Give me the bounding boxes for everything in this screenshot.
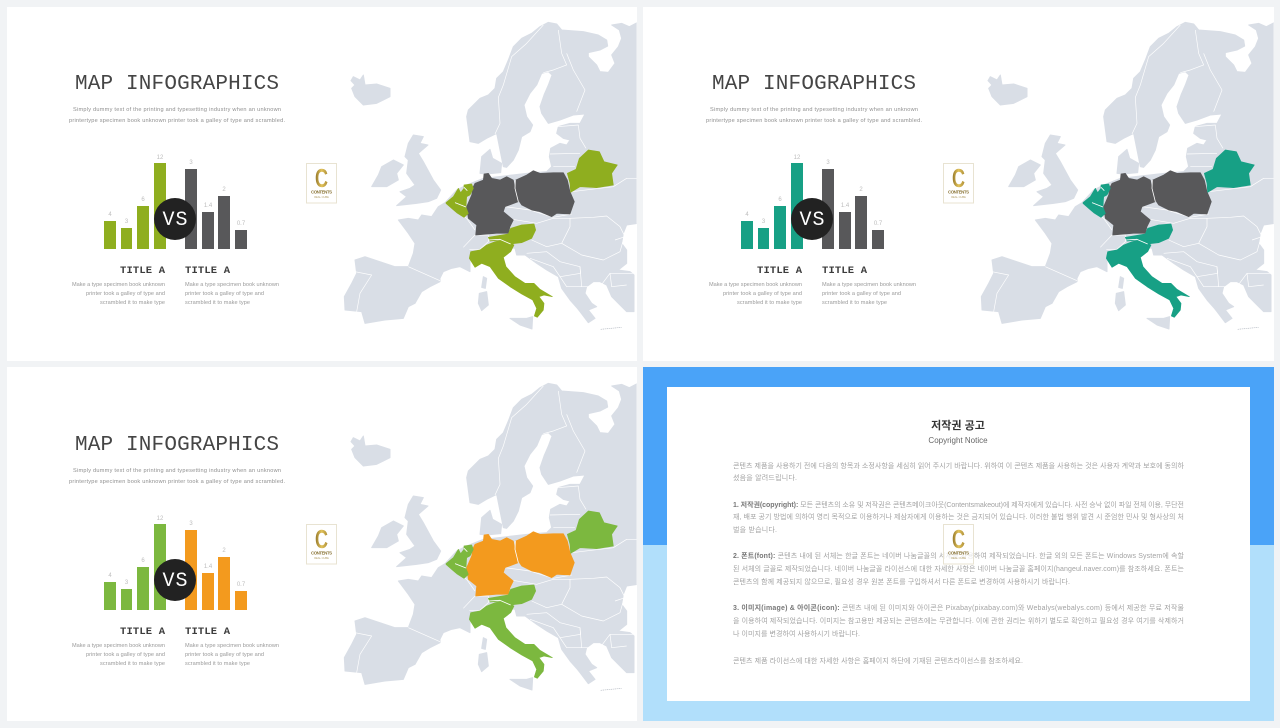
- bar value labels: 6: [778, 197, 782, 203]
- panel: green vs dark map infographic: [7, 7, 638, 361]
- title: MAP INFOGRAPHICS: [75, 434, 279, 457]
- bar value labels: 12: [157, 155, 164, 161]
- VS badge: [154, 559, 196, 601]
- notice intro: [733, 461, 1185, 482]
- intro text: [69, 107, 285, 124]
- left column text: Make a type specimen book unknown: [72, 643, 165, 649]
- right column text: printer took a galley of type and: [185, 291, 264, 297]
- bar value labels: 12: [794, 155, 801, 161]
- left column text: TITLE A: [120, 626, 166, 638]
- logo: [944, 524, 974, 564]
- bar value labels: 1.4: [841, 203, 850, 209]
- map of Europe: [344, 22, 638, 329]
- notice intro: 콘텐츠 제품을 사용하기 전에 다음의 항목과 소정사항을 세심히 읽어 주시기 바랍니다. 위하여 이 콘텐츠 제품을 사용하는 것은 사용자 계약과 보호에 동의하: [733, 461, 1185, 470]
- logo: C: [952, 524, 965, 554]
- bar value labels: 4: [108, 573, 112, 579]
- logo: [944, 163, 974, 203]
- right column text: scrambled it to make type: [185, 300, 250, 306]
- right column text: Make a type specimen book unknown: [822, 282, 916, 288]
- bar chart: right series: [185, 530, 247, 610]
- notice section 3: images and icons: 나 이미지를 변경하여 사용하시기 바랍니다.: [733, 629, 860, 638]
- VS badge: [154, 198, 196, 240]
- left column text: printer took a galley of type and: [723, 291, 802, 297]
- notice intro: 셨음을 알려드립니다.: [733, 473, 797, 482]
- bar chart: left series: [104, 163, 166, 249]
- bar value labels: 0.7: [237, 582, 246, 588]
- logo: REAL CUBE: [314, 556, 329, 560]
- intro text: printertype specimen book unknown printer took a galley of type and scrambled.: [706, 118, 922, 124]
- bar chart: right series: [822, 169, 884, 249]
- left column text: TITLE A: [757, 265, 803, 277]
- panel: green vs orange map infographic: [7, 367, 638, 721]
- bar value labels: [108, 516, 246, 588]
- bar value labels: [745, 155, 883, 227]
- logo: CONTENTS: [948, 550, 969, 556]
- bar value labels: 0.7: [874, 221, 883, 227]
- bar value labels: 6: [141, 558, 145, 564]
- notice section 1: copyright: 재, 배포 공기 방법에 의하여 영리 목적으로 이용하거나 제삼자에게 이용하는 것은 금지되어 있습니다. 이러한 불법 행위 발견 시 준엄한 민사 및 형사상의 처: [733, 512, 1184, 521]
- right column text: scrambled it to make type: [822, 300, 887, 306]
- bar value labels: 2: [222, 187, 226, 193]
- right column text: [185, 626, 279, 667]
- left column text: [72, 265, 166, 306]
- notice section 1: copyright: [733, 500, 1184, 534]
- right column text: TITLE A: [822, 265, 868, 277]
- intro text: Simply dummy text of the printing and typesetting industry when an unknown: [710, 107, 918, 113]
- intro text: [706, 107, 922, 124]
- notice section 2: font: 2. 폰트(font): 콘텐츠 내에 된 서체는 한글 폰트는 네이버 나눔글꼴의 서체를 사용하여 제작되었습니다. 한글 외의 모든 폰트는 Windows System에 속할: [733, 551, 1185, 560]
- bar value labels: [108, 155, 246, 227]
- bar value labels: 2: [222, 548, 226, 554]
- bar value labels: 3: [189, 521, 193, 527]
- left column text: printer took a galley of type and: [86, 652, 165, 658]
- bar value labels: 12: [157, 516, 164, 522]
- intro text: printertype specimen book unknown printer took a galley of type and scrambled.: [69, 479, 285, 485]
- intro text: Simply dummy text of the printing and typesetting industry when an unknown: [73, 107, 281, 113]
- intro text: printertype specimen book unknown printer took a galley of type and scrambled.: [69, 118, 285, 124]
- logo: REAL CUBE: [314, 195, 329, 199]
- notice section 3: images and icons: [733, 603, 1185, 638]
- panel: copyright notice: [643, 367, 1274, 721]
- bar value labels: 3: [762, 219, 766, 225]
- left column text: printer took a galley of type and: [86, 291, 165, 297]
- logo: [306, 524, 336, 564]
- left column text: Make a type specimen book unknown: [72, 282, 165, 288]
- intro text: Simply dummy text of the printing and typesetting industry when an unknown: [73, 468, 281, 474]
- left column text: scrambled it to make type: [100, 300, 165, 306]
- notice section 2: font: 콘텐츠의 함께 제공되지 않으므로, 필요성 경우 원본 폰트를 구입하셔서 다른 폰트로 변경하여 사용하시기 바랍니다.: [733, 577, 1070, 586]
- notice footer: 콘텐츠 제품 라이선스에 대한 자세한 사항은 홈페이지 하단에 기재된 콘텐츠라이선스를 참조하세요.: [733, 656, 1023, 665]
- notice section 3: images and icons: 을 이용하여 제작되었습니다. 이미지는 참고용만 제공되는 콘텐츠에는 무관합니다. 이에 관한 권리는 위하기 별도로 확인하고 필요성 경우 여기를 삭제하거: [733, 616, 1184, 625]
- bar chart: right series: [185, 169, 247, 249]
- left column text: Make a type specimen book unknown: [709, 282, 802, 288]
- logo: CONTENTS: [311, 550, 332, 556]
- right column text: TITLE A: [185, 265, 231, 277]
- right column text: TITLE A: [185, 626, 231, 638]
- notice section 2: font: 된 서체의 글꼴로 제작되었습니다. 네이버 나눔글꼴 라이선스에 대한 자세한 사항은 네이버 나눔글꼴 홈페이지(hangeul.naver.com)를 참조하세요. 폰트는: [733, 564, 1185, 573]
- logo: C: [315, 524, 328, 554]
- logo: REAL CUBE: [951, 195, 966, 199]
- bar value labels: 3: [826, 160, 830, 166]
- VS badge: VS: [162, 570, 188, 593]
- left column text: TITLE A: [120, 265, 166, 277]
- bar value labels: 3: [125, 219, 129, 225]
- intro text: [69, 468, 285, 485]
- map of Europe: [344, 383, 638, 690]
- left column text: scrambled it to make type: [100, 661, 165, 667]
- bar value labels: 4: [108, 212, 112, 218]
- right column text: [185, 265, 279, 306]
- logo: [306, 163, 336, 203]
- VS badge: VS: [800, 209, 824, 232]
- left column text: [709, 265, 803, 306]
- notice section 2: font: [733, 551, 1185, 586]
- right column text: Make a type specimen book unknown: [185, 282, 279, 288]
- bar chart: left series: [104, 524, 166, 610]
- bar value labels: 6: [141, 197, 145, 203]
- notice section 3: images and icons: 3. 이미지(image) & 아이콘(icon): 콘텐츠 내에 된 이미지와 아이콘은 Pixabay(pixabay.com)와 Webalys(webalys.com) 등에서 제공한 무료 저작물: [733, 603, 1185, 612]
- logo: REAL CUBE: [951, 556, 966, 560]
- right column text: printer took a galley of type and: [185, 652, 264, 658]
- left column text: [72, 626, 166, 667]
- title: MAP INFOGRAPHICS: [75, 73, 279, 96]
- bar value labels: 1.4: [204, 564, 213, 570]
- notice section 1: copyright: 벌을 받습니다.: [733, 525, 777, 534]
- notice heading: 저작권 공고: [931, 418, 985, 432]
- bar value labels: 0.7: [237, 221, 246, 227]
- notice section 1: copyright: 1. 저작권(copyright): 모든 콘텐츠의 소유 및 저작권은 콘텐츠메이크아웃(Contentsmakeout)에 제작자에게 있습니다. 사전 승낙 없이 파일 전체 이용, 무단전: [733, 500, 1184, 509]
- right column text: scrambled it to make type: [185, 661, 250, 667]
- bar value labels: 1.4: [204, 203, 213, 209]
- logo: C: [315, 163, 328, 193]
- logo: C: [952, 163, 965, 193]
- title: MAP INFOGRAPHICS: [712, 73, 916, 96]
- VS badge: [791, 198, 833, 240]
- logo: CONTENTS: [948, 190, 969, 194]
- panel: teal vs dark map infographic: [643, 7, 1275, 361]
- bar value labels: 3: [125, 580, 129, 586]
- left column text: scrambled it to make type: [737, 300, 802, 306]
- VS badge: VS: [162, 209, 188, 232]
- map of Europe: [981, 22, 1275, 329]
- bar value labels: 2: [859, 187, 863, 193]
- bar chart: left series: [741, 163, 803, 249]
- logo: CONTENTS: [311, 190, 332, 194]
- bar value labels: 3: [189, 160, 193, 166]
- right column text: printer took a galley of type and: [822, 291, 901, 297]
- right column text: Make a type specimen book unknown: [185, 643, 279, 649]
- bar value labels: 4: [745, 212, 749, 218]
- right column text: [822, 265, 916, 306]
- notice subheading: Copyright Notice: [928, 436, 988, 445]
